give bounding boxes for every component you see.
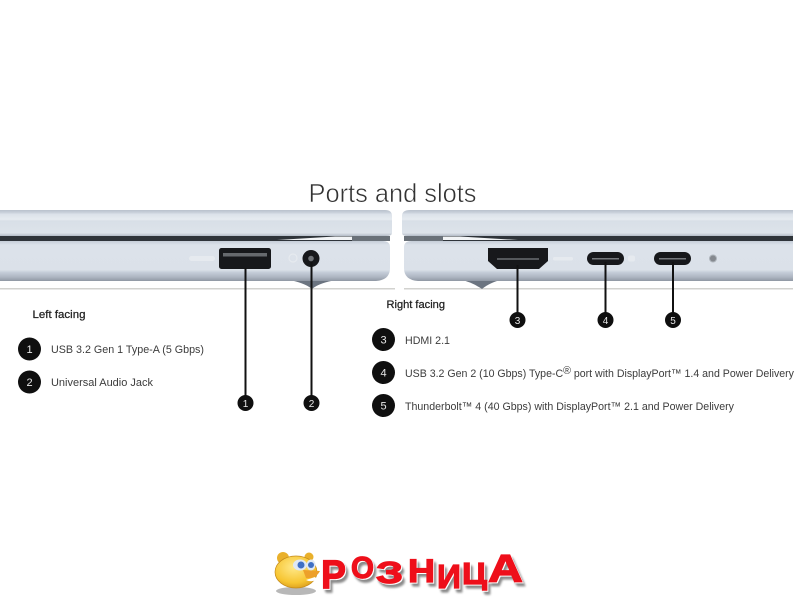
- callout 1: [238, 268, 254, 411]
- logo: [275, 548, 523, 597]
- callout 1: 1: [243, 399, 249, 410]
- callout 3: 3: [515, 316, 521, 327]
- title: Ports and slots: [308, 178, 476, 208]
- logo wordmark: Ц: [462, 556, 487, 591]
- port label: USB symbol: [189, 256, 215, 261]
- legend item 5: 5: [380, 400, 387, 412]
- icon: USB-A port: [219, 248, 271, 269]
- logo wordmark: [321, 548, 523, 597]
- legend item 1: USB 3.2 Gen 1 Type-A (5 Gbps): [51, 344, 204, 356]
- legend item 4: [372, 361, 794, 384]
- port label: HDMI symbol: [553, 257, 573, 260]
- legend item 4: port with DisplayPort™ 1.4 and Power Delivery: [571, 368, 794, 380]
- legend item 2: Universal Audio Jack: [51, 377, 153, 389]
- callout 2: 2: [309, 399, 315, 410]
- icon: USB-C port 4: [587, 252, 624, 265]
- icon: mascot: [275, 552, 320, 588]
- icon: audio jack: [302, 250, 320, 267]
- legend item 5: [372, 394, 734, 417]
- logo wordmark: Р: [321, 553, 346, 597]
- port label: headset symbol: [289, 254, 297, 262]
- port label: power symbol: [628, 256, 635, 262]
- legend item 4: 4: [380, 368, 387, 380]
- panel: left side laptop: [0, 210, 395, 290]
- legend item 2: 2: [26, 377, 33, 389]
- legend item 4: USB 3.2 Gen 2 (10 Gbps) Type-C: [405, 368, 569, 380]
- callout 5: 5: [670, 316, 676, 327]
- callout 5: [665, 262, 681, 328]
- legend item 4: ®: [563, 365, 571, 377]
- logo shadow: [276, 587, 316, 595]
- legend item 3: [372, 328, 450, 351]
- callout 4: 4: [603, 316, 609, 327]
- panel: right side laptop: [402, 210, 793, 290]
- legend item 3: 3: [380, 334, 387, 346]
- logo wordmark: Н: [408, 553, 435, 589]
- heading: left facing: Left facing: [32, 309, 86, 321]
- logo wordmark: З: [376, 555, 403, 590]
- legend item 5: Thunderbolt™ 4 (40 Gbps) with DisplayPort™ 2.1 and Power Delivery: [405, 401, 734, 413]
- logo wordmark: И: [437, 558, 461, 595]
- callout 2: [304, 262, 320, 411]
- callout 3: [510, 265, 526, 328]
- logo wordmark: О: [351, 550, 374, 585]
- logo wordmark: А: [488, 548, 523, 591]
- heading: right facing: Right facing: [386, 299, 445, 311]
- callout 4: [598, 262, 614, 328]
- legend item 1: 1: [26, 344, 33, 356]
- icon: status LED: [710, 255, 716, 262]
- legend item 1: [18, 338, 204, 360]
- icon: USB-C port 5: [654, 252, 691, 265]
- legend item 2: [18, 370, 153, 394]
- icon: HDMI port: [488, 248, 548, 269]
- legend item 3: HDMI 2.1: [405, 335, 450, 347]
